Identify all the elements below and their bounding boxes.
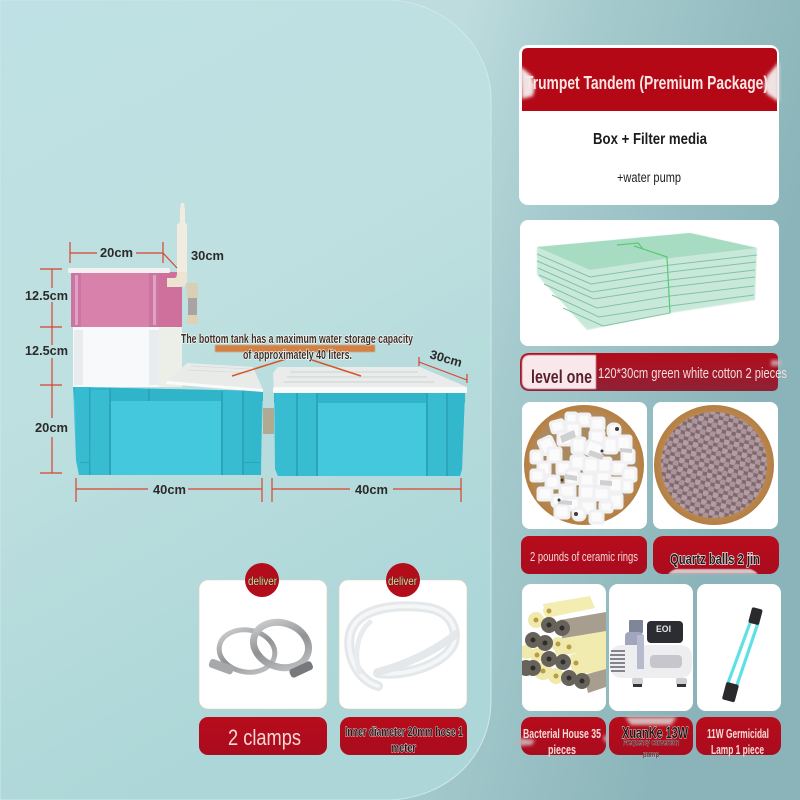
label: quartz balls: Quartz balls 2 jin: [670, 551, 760, 568]
panel: germicidal lamp: [697, 584, 781, 711]
label: bacterial house: Bacterial House 35: [523, 726, 601, 741]
right lid: [273, 367, 467, 393]
badge: deliver left: [245, 563, 279, 597]
label: hose: [340, 717, 467, 755]
title banner: [520, 48, 779, 111]
dimension labels: 30cm: [428, 347, 464, 370]
icon: silicone hose: [349, 606, 456, 686]
dimension labels: 40cm: [153, 483, 186, 497]
add-on text: +water pump: [617, 170, 681, 185]
icon: UV lamp: [722, 607, 763, 703]
label: clamps: [199, 717, 327, 755]
label: level one: level one: [531, 367, 592, 387]
label: level one: [520, 353, 787, 391]
icon: pump: EOI: [656, 624, 671, 634]
label: pump: Frequency conversion: [623, 738, 679, 747]
panel: quartz balls: [653, 402, 778, 529]
dimension labels: 20cm: [35, 421, 68, 435]
pipe assembly: [167, 203, 198, 324]
label: quartz balls: [653, 536, 779, 574]
label: pump: [609, 717, 693, 759]
left lid: [166, 363, 263, 392]
badge: deliver left: deliver: [248, 574, 277, 588]
badge: deliver right: deliver: [388, 574, 417, 588]
dimension lines: [40, 242, 467, 502]
panel: green white cotton: [520, 220, 779, 346]
panel: product dimensions area: [0, 0, 491, 800]
icon: hose clamps: [208, 615, 314, 679]
subtitle: Box + Filter media: [593, 131, 707, 148]
left blue box: [73, 387, 263, 475]
label: bacterial house: [519, 717, 608, 757]
label: clamps: 2 clamps: [228, 725, 301, 750]
callout: water storage capacity: [181, 332, 413, 376]
dimension labels: [25, 246, 464, 497]
panel: ceramic rings: [522, 402, 647, 529]
white middle box: [73, 327, 182, 387]
icon: bowl of quartz balls: [654, 405, 774, 525]
label: hose: Inner diameter 20mm hose 1: [345, 724, 463, 739]
badge: deliver right: [386, 563, 420, 597]
panel: package title card: [519, 45, 779, 205]
dimension labels: 30cm: [191, 249, 224, 263]
callout: water storage capacity: of approximately 40 liters.: [243, 348, 352, 362]
pink top box: [68, 268, 182, 327]
label: pump: pump: [643, 750, 659, 759]
icon: bio media blocks: [518, 596, 606, 693]
label: bacterial house: pieces: [548, 742, 576, 757]
connector pipe: [263, 408, 274, 434]
label: ceramic rings: [521, 536, 647, 574]
dimension labels: 40cm: [355, 483, 388, 497]
panel: bacterial house: [518, 584, 606, 711]
panel: clamps: [199, 580, 327, 709]
dimension labels: 12.5cm: [25, 344, 68, 358]
callout: water storage capacity: The bottom tank has a maximum water storage capacity: [181, 332, 413, 346]
dimension labels: 20cm: [100, 246, 133, 260]
label: hose: meter: [391, 740, 416, 755]
dimension labels: 12.5cm: [25, 289, 68, 303]
panel: hose: [339, 580, 467, 709]
panel: water pump: [609, 584, 693, 711]
product photo: stacked filter boxes: [68, 203, 467, 476]
label: ceramic rings: 2 pounds of ceramic rings: [530, 549, 638, 564]
icon: bowl of ceramic rings: [524, 405, 644, 525]
label: lamp: Lamp 1 piece: [711, 742, 764, 757]
label: pump: XuanKe 13W: [622, 725, 689, 742]
icon: filter cotton stack: [537, 233, 757, 330]
label: lamp: [696, 717, 781, 757]
right blue box: [274, 392, 465, 476]
